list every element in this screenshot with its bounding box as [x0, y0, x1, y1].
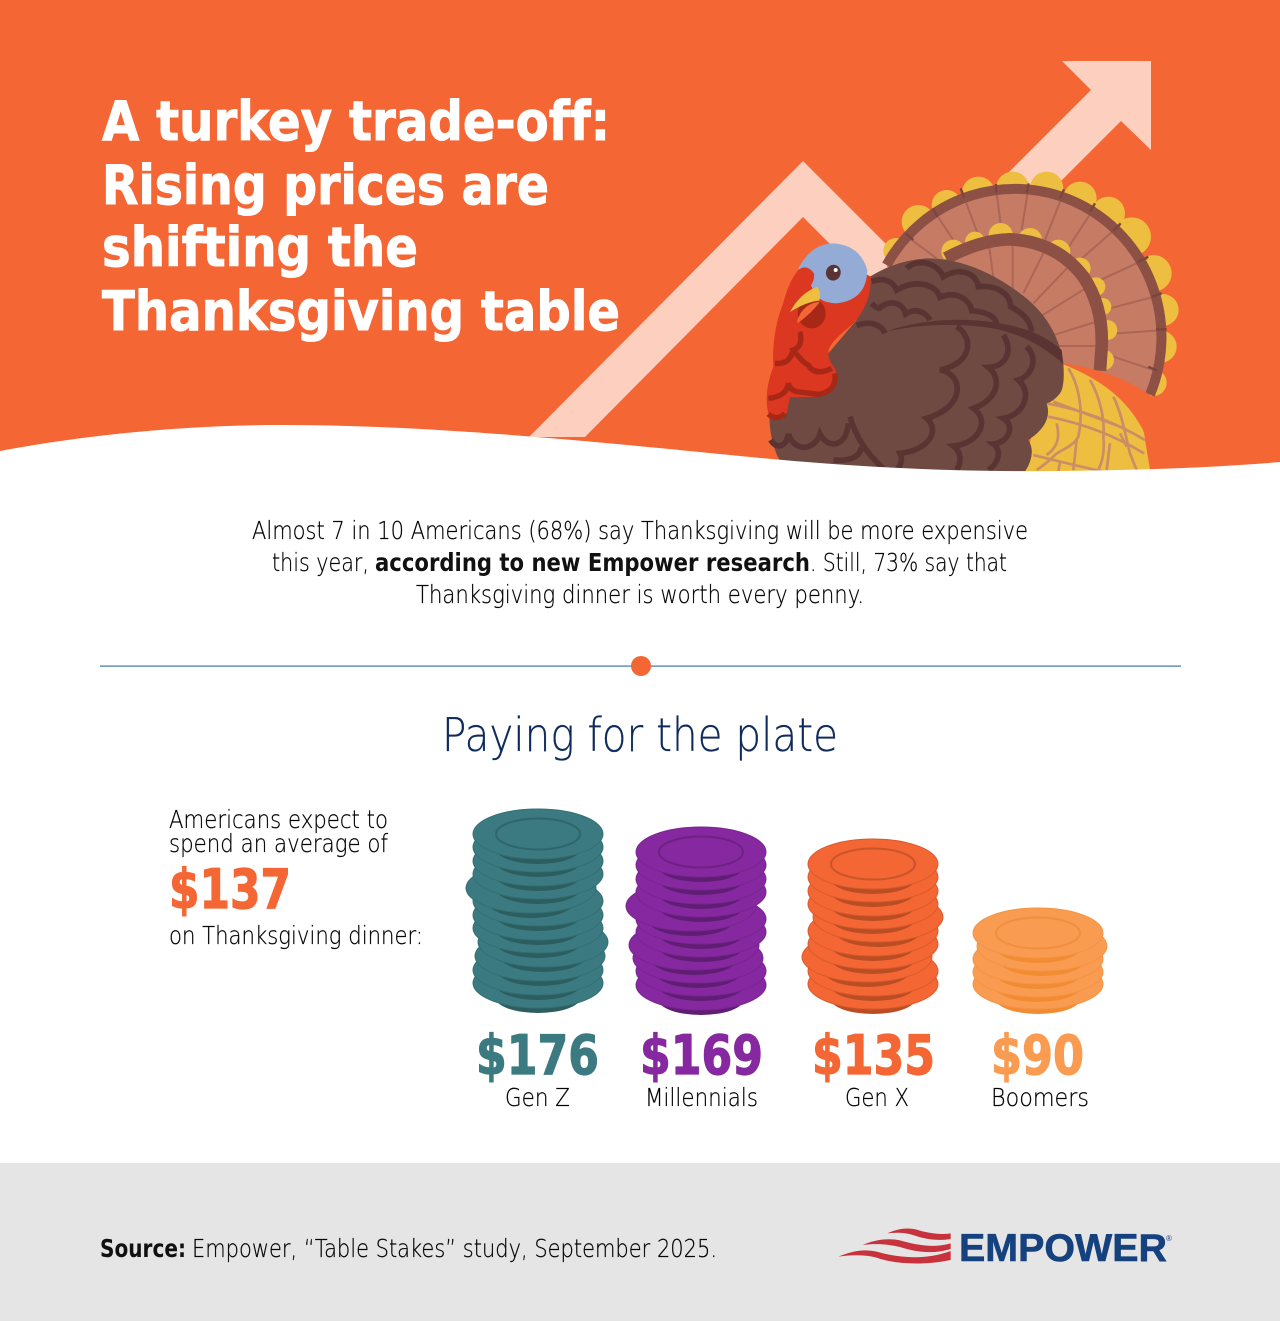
average spend callout: Americans expect to [169, 805, 388, 834]
intro paragraph: Thanksgiving dinner is worth every penny. [416, 580, 864, 609]
head [798, 243, 867, 303]
turkey illustration [767, 172, 1179, 473]
snood [773, 267, 814, 350]
intro paragraph: . Still, 73% say that [810, 548, 1007, 577]
intro paragraph: Almost 7 in 10 Americans (68%) say Thanksgiving will be more expensive [252, 516, 1028, 545]
value: Gen X: Gen X [845, 1083, 909, 1112]
plate stack: Gen Z [466, 809, 608, 1013]
section heading: Paying for the plate [442, 708, 838, 762]
intro paragraph: according to new Empower research [375, 548, 810, 577]
title [102, 90, 620, 343]
average spend callout: $137 [169, 858, 291, 921]
outer tail fan [887, 183, 1167, 395]
logo wordmark: EMPOWER [959, 1227, 1167, 1270]
value: Gen Z: $176 [476, 1024, 599, 1087]
feather scallops [771, 263, 1033, 470]
value: Gen X: $135 [812, 1024, 935, 1087]
header background [0, 0, 1280, 480]
average spend callout: spend an average of [169, 829, 388, 858]
plate stack: Gen X [802, 839, 943, 1014]
white wave [0, 425, 1280, 1170]
value: Boomers [991, 1024, 1089, 1112]
average spend callout: on Thanksgiving dinner: [169, 921, 423, 950]
title: A turkey trade-off: [102, 90, 610, 153]
neck and wattle [767, 260, 871, 418]
value: Boomers: $90 [991, 1024, 1084, 1087]
footer band [0, 1163, 1280, 1321]
beak [790, 287, 820, 312]
Empower logo [838, 1227, 1172, 1270]
intro paragraph: this year, [272, 548, 369, 577]
eye [824, 263, 842, 282]
body plumage [769, 258, 1064, 472]
value: Gen Z: Gen Z [505, 1083, 570, 1112]
value: Boomers: Boomers [991, 1083, 1089, 1112]
plate stack: Millennials [626, 827, 766, 1015]
tail feather tips [883, 172, 1179, 396]
average spend callout [169, 805, 423, 950]
rising arrow [529, 61, 1151, 437]
intro paragraph [252, 516, 1028, 609]
title: Thanksgiving table [102, 280, 620, 343]
logo flag [838, 1228, 951, 1263]
divider with dot [100, 656, 1181, 676]
folded wing [1023, 358, 1151, 473]
plate stack: Boomers [973, 908, 1107, 1014]
value: Gen X [812, 1024, 935, 1112]
wing shoulder band [885, 320, 1063, 364]
value: Millennials [640, 1024, 763, 1112]
value: Gen Z [476, 1024, 599, 1112]
source note: Source: [100, 1234, 186, 1263]
value: Millennials: $169 [640, 1024, 763, 1087]
value: Millennials: Millennials [645, 1083, 758, 1112]
registered mark: ® [1166, 1234, 1172, 1243]
title: Rising prices are [102, 154, 549, 217]
inner tail fan [940, 223, 1117, 373]
source note: Empower, “Table Stakes” study, September 2025. [192, 1234, 717, 1263]
title: shifting the [102, 216, 418, 279]
